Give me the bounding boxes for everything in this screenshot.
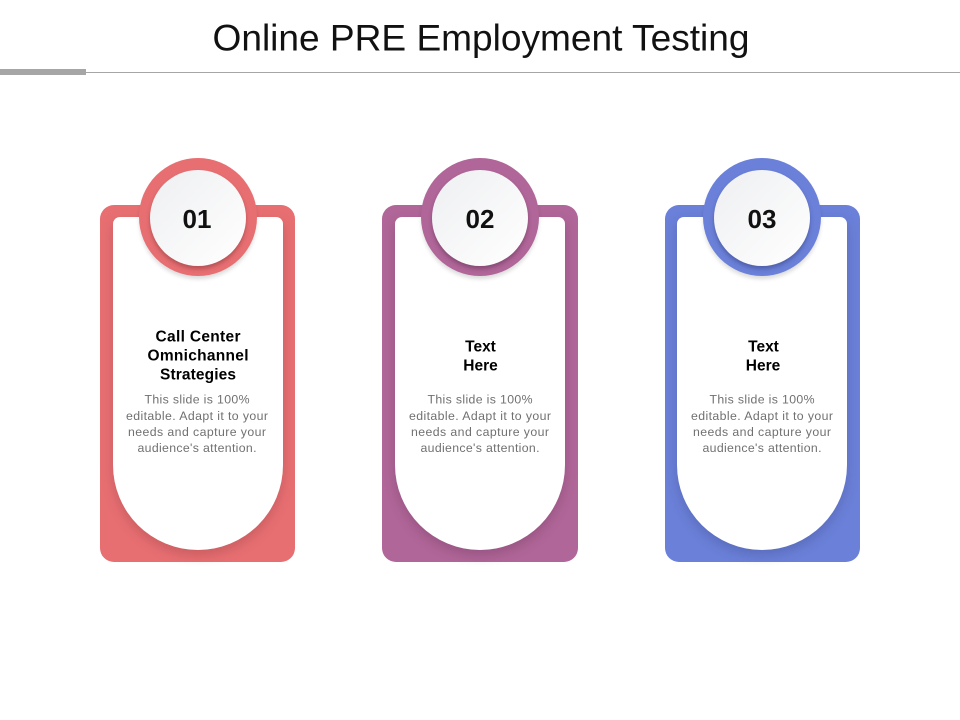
body text 02 [409,392,551,455]
heading 02: Text [465,338,496,356]
heading 02 [463,338,498,374]
heading 01 [148,328,248,384]
body text 01: audience's attention. [138,441,256,455]
heading 01: Call Center [156,328,240,346]
body text 01 [126,392,268,455]
number badge 01: 01 [183,204,211,234]
body text 02: editable. Adapt it to your [409,409,551,423]
title: Online PRE Employment Testing [212,18,750,58]
body text 03 [691,392,833,455]
body text 02: needs and capture your [411,425,549,439]
heading 03 [746,338,781,374]
card frame 03 [665,205,860,562]
number badge 02: 02 [466,204,494,234]
number badge 03: 03 [748,204,776,234]
body text 01: needs and capture your [128,425,266,439]
body text 02: This slide is 100% [428,392,533,406]
heading 02: Here [463,358,498,374]
panel: card 02 [382,158,578,562]
card inner shadow 03 [677,222,847,555]
heading 03: Here [746,358,781,374]
body text 01: This slide is 100% [144,392,250,406]
body text 03: audience's attention. [702,441,822,455]
panel: card 03 [665,158,860,562]
header rule [0,69,960,75]
heading 01: Strategies [160,366,236,384]
body text 02: audience's attention. [420,441,540,455]
heading 01: Omnichannel [148,348,248,364]
number badge 03 [703,158,821,279]
body text 03: needs and capture your [693,425,831,439]
card frame 02 [382,205,578,562]
body text 03: editable. Adapt it to your [691,409,833,423]
card inner shadow 02 [395,222,565,555]
body text 03: This slide is 100% [710,392,815,406]
number badge 01 [139,158,257,279]
card inner 01 [113,217,283,550]
panel: card 01 [100,158,295,562]
heading 03: Text [748,338,779,356]
card inner 02 [395,217,565,550]
card frame 01 [100,205,295,562]
body text 01: editable. Adapt it to your [126,409,268,423]
card inner shadow 01 [113,222,283,555]
number badge 02 [421,158,539,279]
card inner 03 [677,217,847,550]
